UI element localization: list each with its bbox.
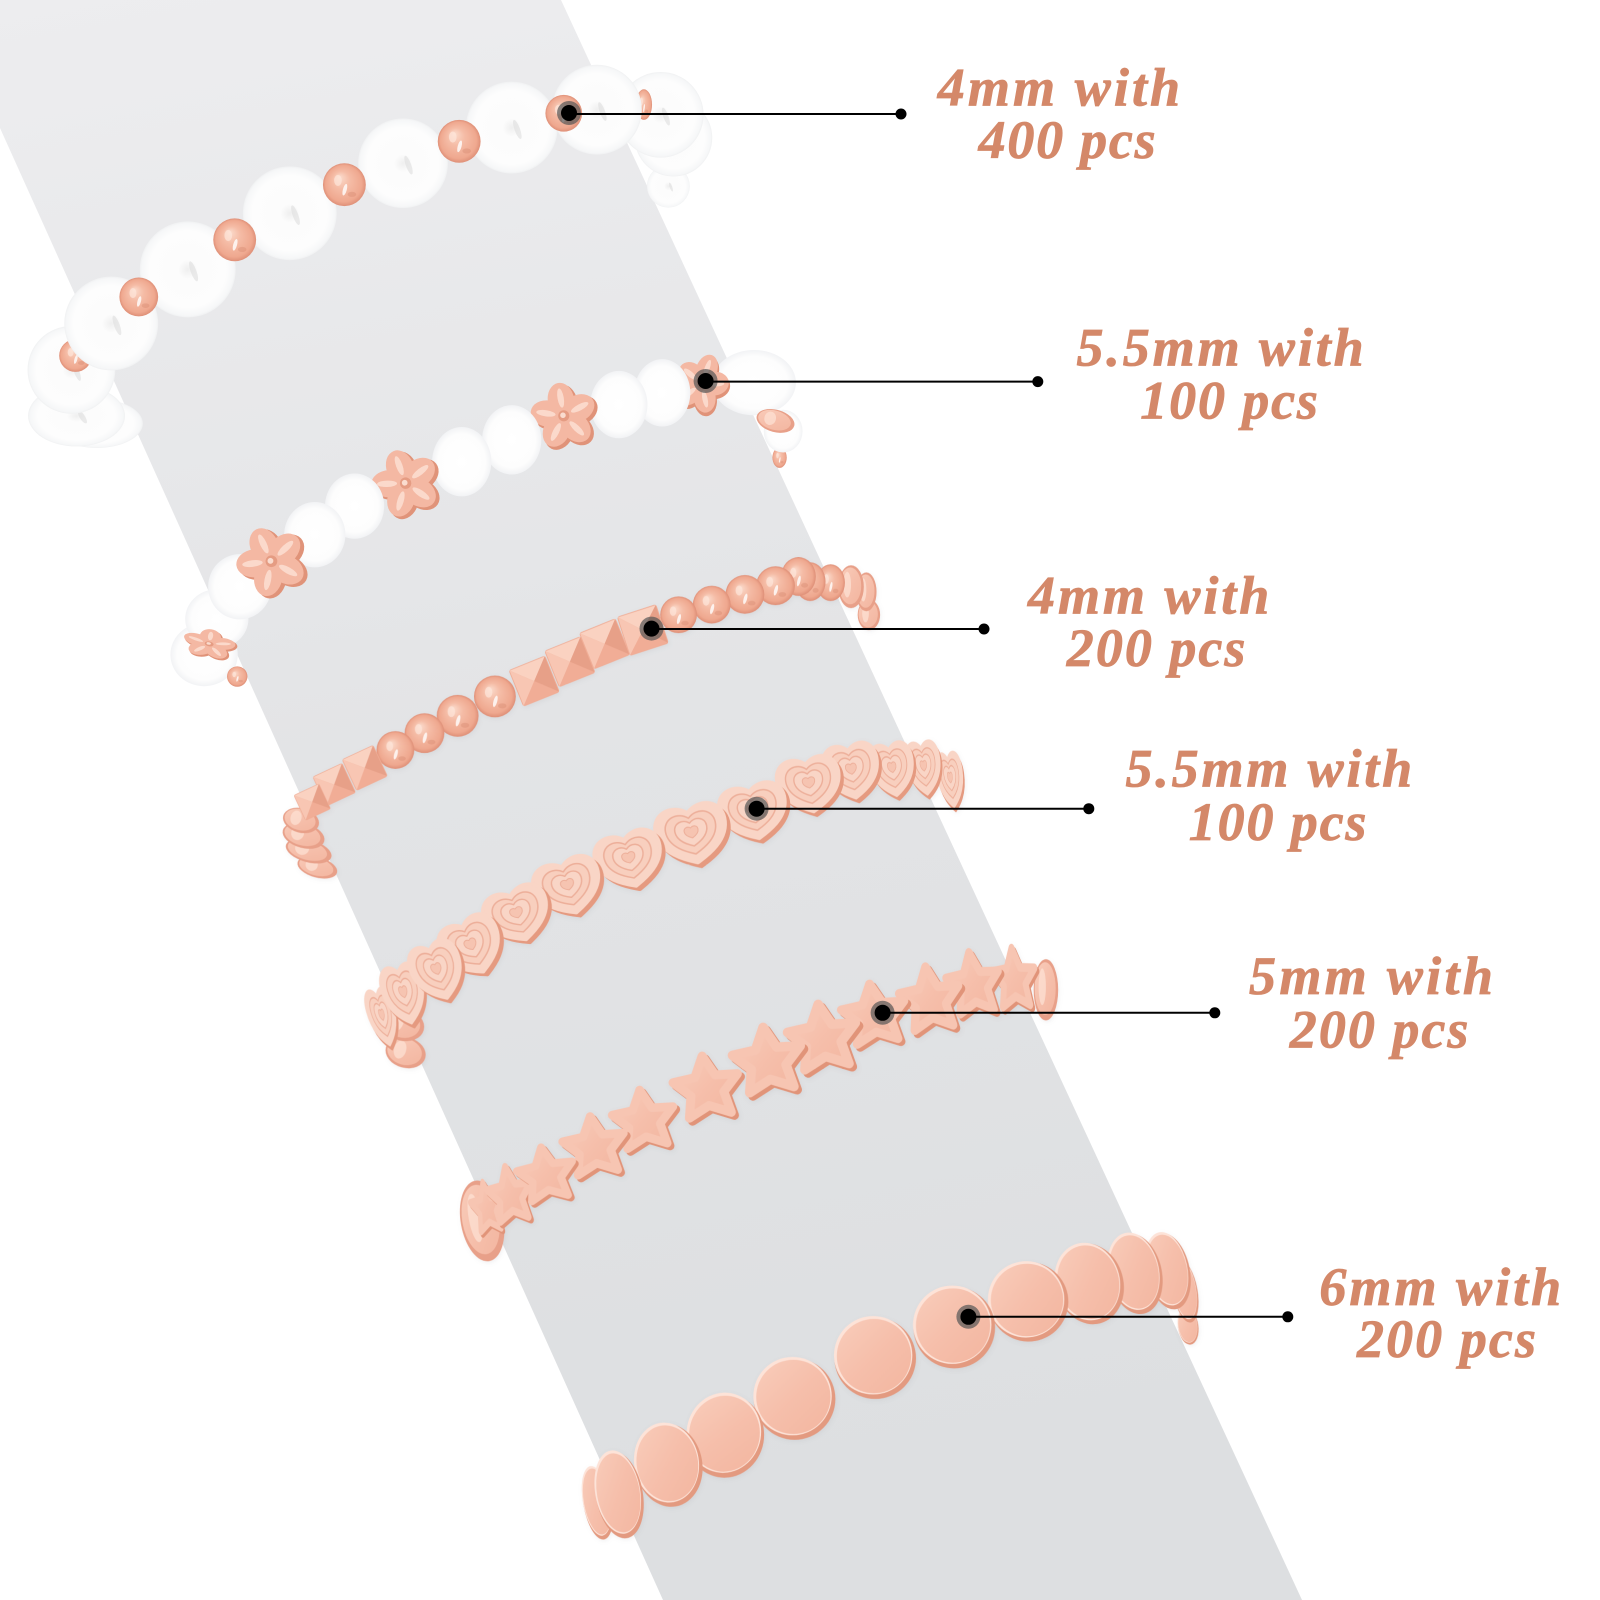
bracelet: white rondelles with flowers bbox=[170, 345, 803, 687]
bracelet: pearls bbox=[28, 65, 712, 448]
callout: flower 5.5mm: 100 pcs bbox=[1140, 370, 1318, 430]
callout: heart 5.5mm: 5.5mm with bbox=[1126, 739, 1412, 799]
bracelet: stars bbox=[454, 946, 1058, 1265]
callout: pyramid 4mm: 200 pcs bbox=[1066, 618, 1245, 678]
callout: flower 5.5mm: 5.5mm with bbox=[1076, 317, 1364, 377]
callout: pearl 4mm bbox=[557, 58, 1180, 170]
callout: coin 6mm: 6mm with bbox=[1319, 1257, 1561, 1317]
callout: flower 5.5mm bbox=[694, 317, 1364, 430]
callout: star 5mm: 200 pcs bbox=[1289, 999, 1468, 1059]
callout: star 5mm bbox=[871, 946, 1493, 1059]
callout: star 5mm: 5mm with bbox=[1249, 946, 1493, 1006]
bracelet: coins bbox=[577, 1227, 1203, 1542]
callout: heart 5.5mm: 100 pcs bbox=[1189, 792, 1366, 852]
bracelet: round and pyramid beads bbox=[280, 557, 880, 882]
callout: pearl 4mm: 4mm with bbox=[937, 58, 1180, 118]
callout: pyramid 4mm bbox=[640, 565, 1269, 678]
callout: pearl 4mm: 400 pcs bbox=[978, 110, 1156, 170]
bracelet: hearts bbox=[362, 739, 968, 1073]
callout: coin 6mm bbox=[956, 1257, 1561, 1369]
callout: pyramid 4mm: 4mm with bbox=[1027, 565, 1269, 625]
callout: heart 5.5mm bbox=[745, 739, 1412, 852]
callout: coin 6mm: 200 pcs bbox=[1356, 1309, 1536, 1369]
